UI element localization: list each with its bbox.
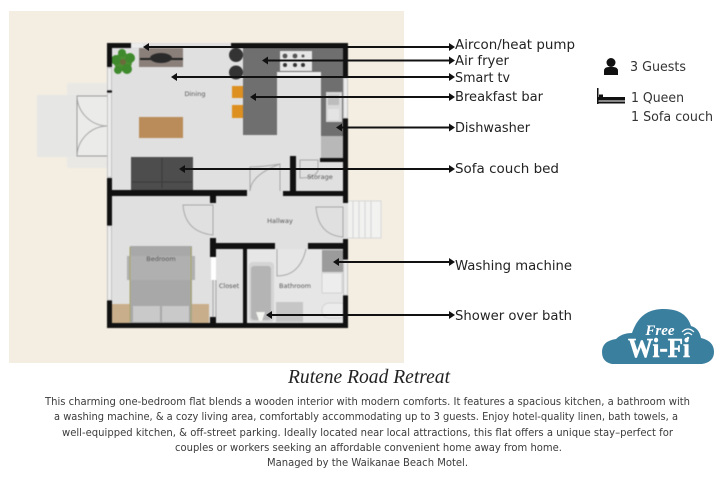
label: Smart tv: Smart tv bbox=[455, 71, 510, 86]
back deck steps bbox=[37, 83, 110, 168]
icon: bed bbox=[597, 88, 625, 104]
arrow: Air fryer bbox=[262, 56, 455, 64]
label: Air fryer: Air fryer bbox=[455, 54, 510, 69]
room label: Bedroom: Bedroom bbox=[146, 255, 176, 263]
icon: Free Wi-Fi cloud bbox=[602, 309, 714, 364]
bar stools bbox=[229, 48, 243, 118]
stove bbox=[280, 51, 312, 71]
sink bbox=[326, 92, 342, 122]
text block: description: couples or workers seeking an affordable convenient home away from home. bbox=[175, 441, 562, 454]
floor plan bbox=[37, 43, 381, 328]
label: Breakfast bar: Breakfast bar bbox=[455, 90, 544, 105]
room label: Hallway: Hallway bbox=[267, 217, 293, 225]
label: Dishwasher: Dishwasher bbox=[455, 121, 531, 136]
icon: guest bbox=[604, 58, 618, 75]
icon: Free Wi-Fi cloud: Free bbox=[644, 323, 675, 339]
windows bbox=[108, 44, 348, 300]
arrow: Smart tv bbox=[171, 73, 455, 81]
room label: Bathroom: Bathroom bbox=[279, 282, 311, 290]
arrow: Aircon/heat pump bbox=[143, 43, 455, 51]
text block: description: Managed by the Waikanae Beach Motel. bbox=[267, 456, 468, 469]
arrow: Shower over bath bbox=[266, 311, 455, 319]
bathroom fixtures bbox=[249, 250, 347, 322]
walls bbox=[107, 43, 348, 328]
text: 1 Sofa couch: 1 Sofa couch bbox=[631, 110, 713, 125]
bathroom floor bbox=[247, 249, 343, 323]
text: 1 Queen: 1 Queen bbox=[631, 91, 684, 106]
arrow: Washing machine bbox=[333, 258, 455, 266]
room label: Closet: Closet bbox=[219, 282, 240, 290]
arrow: Dishwasher bbox=[336, 124, 455, 132]
icon: Free Wi-Fi cloud: Wi-Fi bbox=[628, 333, 690, 363]
label: Aircon/heat pump: Aircon/heat pump bbox=[455, 38, 575, 53]
text block: description: well-equipped kitchen, & off-street parking. Ideally located near local attractions, this flat offers a unique stay–perfect for bbox=[62, 426, 673, 439]
closet opening bbox=[211, 257, 216, 280]
doors bbox=[183, 160, 343, 317]
text block: description bbox=[44, 395, 690, 469]
label: Sofa couch bed: Sofa couch bed bbox=[455, 162, 559, 177]
dining table bbox=[139, 117, 183, 138]
panel: beige site background bbox=[9, 11, 404, 363]
room label: Dining: Dining bbox=[185, 90, 205, 98]
front steps bbox=[347, 201, 381, 238]
kitchen counters bbox=[243, 48, 343, 158]
label: Washing machine: Washing machine bbox=[455, 259, 572, 274]
arrow: Breakfast bar bbox=[250, 93, 455, 101]
sofa couch bbox=[131, 157, 193, 190]
bedroom furniture bbox=[112, 246, 209, 323]
smart tv unit bbox=[139, 48, 183, 67]
text: 3 Guests: 3 Guests bbox=[630, 60, 686, 75]
title: Rutene Road Retreat bbox=[287, 366, 450, 388]
floor bbox=[107, 43, 348, 328]
room label: Storage: Storage bbox=[307, 173, 333, 181]
arrow: Sofa couch bed bbox=[179, 165, 455, 173]
label: Shower over bath: Shower over bath bbox=[455, 309, 572, 324]
plant bbox=[111, 49, 135, 74]
